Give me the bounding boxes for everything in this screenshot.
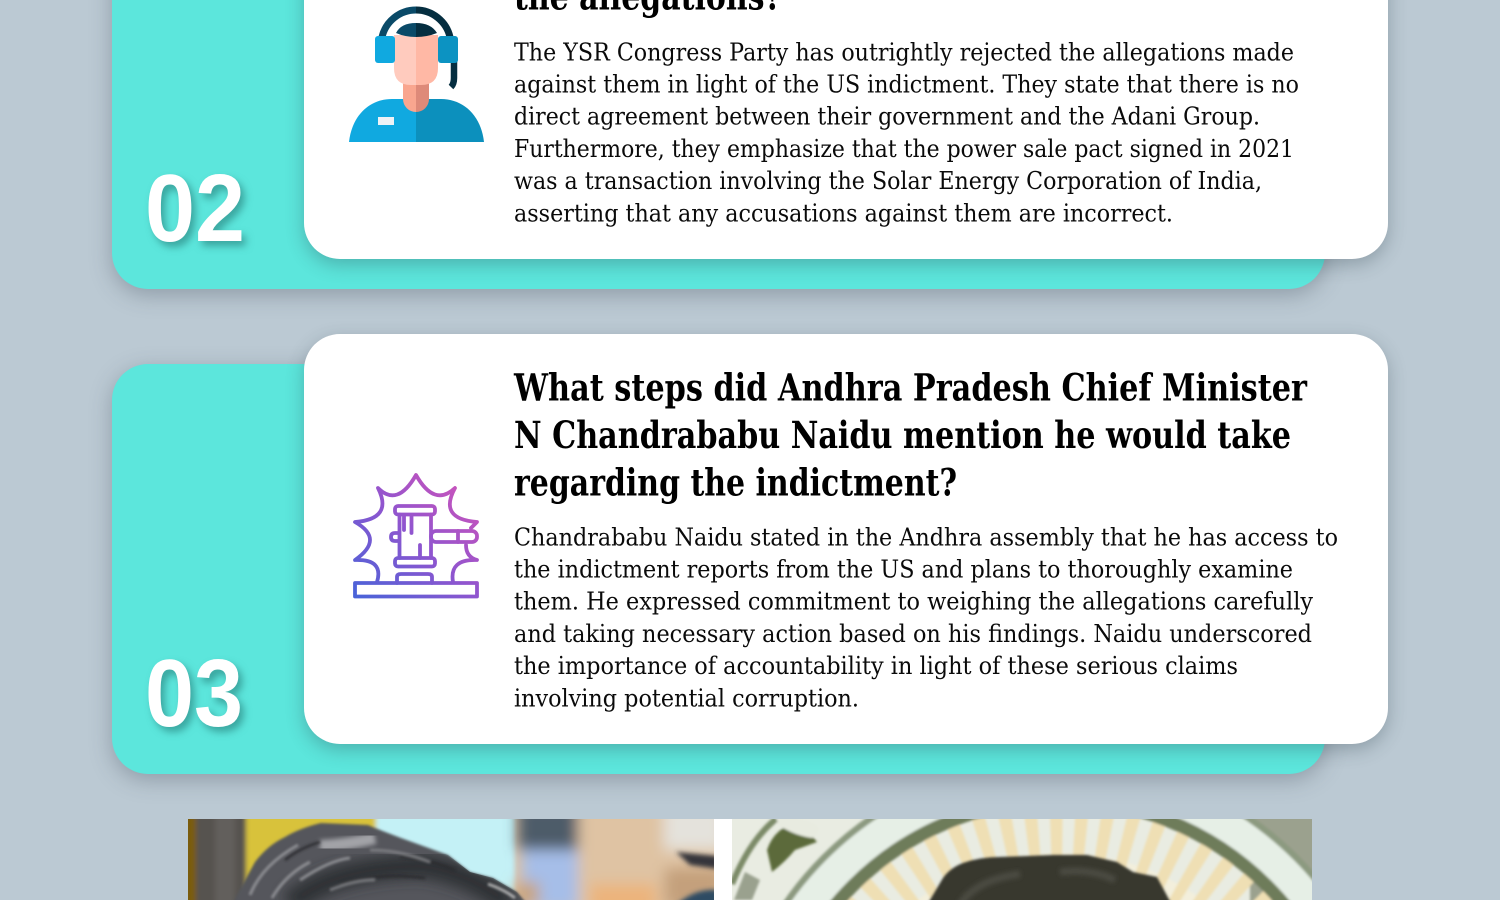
number 02: 02 (145, 155, 245, 262)
photo: right portrait (732, 819, 1312, 900)
panel: question 02 white card (304, 0, 1388, 259)
heading: question 03 (513, 366, 1307, 504)
text: answer 02: direct agreement between their government and the Adani Group. (514, 102, 1260, 131)
heading: question 03: What steps did Andhra Pradesh Chief Minister (513, 366, 1307, 410)
text: answer 02: asserting that any accusations against them are incorrect. (514, 198, 1173, 227)
number 03: 03 (145, 640, 243, 747)
text: answer 03: Chandrababu Naidu stated in the Andhra assembly that he has access to (514, 522, 1338, 551)
heading: question 03: regarding the indictment? (514, 460, 957, 504)
heading: question 03: N Chandrababu Naidu mention he would take (514, 413, 1291, 457)
text: answer 03: and taking necessary action based on his findings. Naidu underscored (514, 619, 1312, 648)
text: answer 02: against them in light of the US indictment. They state that there is no (514, 70, 1299, 98)
text: answer 03: the importance of accountability in light of these serious claims (514, 651, 1238, 680)
text: answer 02: The YSR Congress Party has outrightly rejected the allegations made (514, 37, 1294, 66)
text: answer 03: involving potential corruption. (514, 683, 859, 712)
panel: question 03 white card (304, 334, 1388, 744)
icon: agent with headset (349, 10, 484, 142)
hair (232, 823, 528, 900)
text: answer 02: Furthermore, they emphasize that the power sale pact signed in 2021 (514, 134, 1294, 163)
panel: question 03 teal backing (112, 364, 1325, 774)
top-right engraving (1250, 810, 1320, 900)
panel: question 02 teal backing (112, 0, 1325, 289)
text: answer 03: them. He expressed commitment to weighing the allegations carefully (514, 587, 1313, 616)
photo: white gap (714, 819, 732, 900)
text: answer 03 (514, 522, 1338, 712)
icon: gavel in starburst (355, 475, 477, 596)
text: answer 02 (514, 37, 1299, 227)
text: answer 03: the indictment reports from the US and plans to thoroughly examine (514, 554, 1293, 584)
photo: left portrait (188, 819, 714, 900)
text: answer 02: was a transaction involving the Solar Energy Corporation of India, (514, 166, 1262, 195)
